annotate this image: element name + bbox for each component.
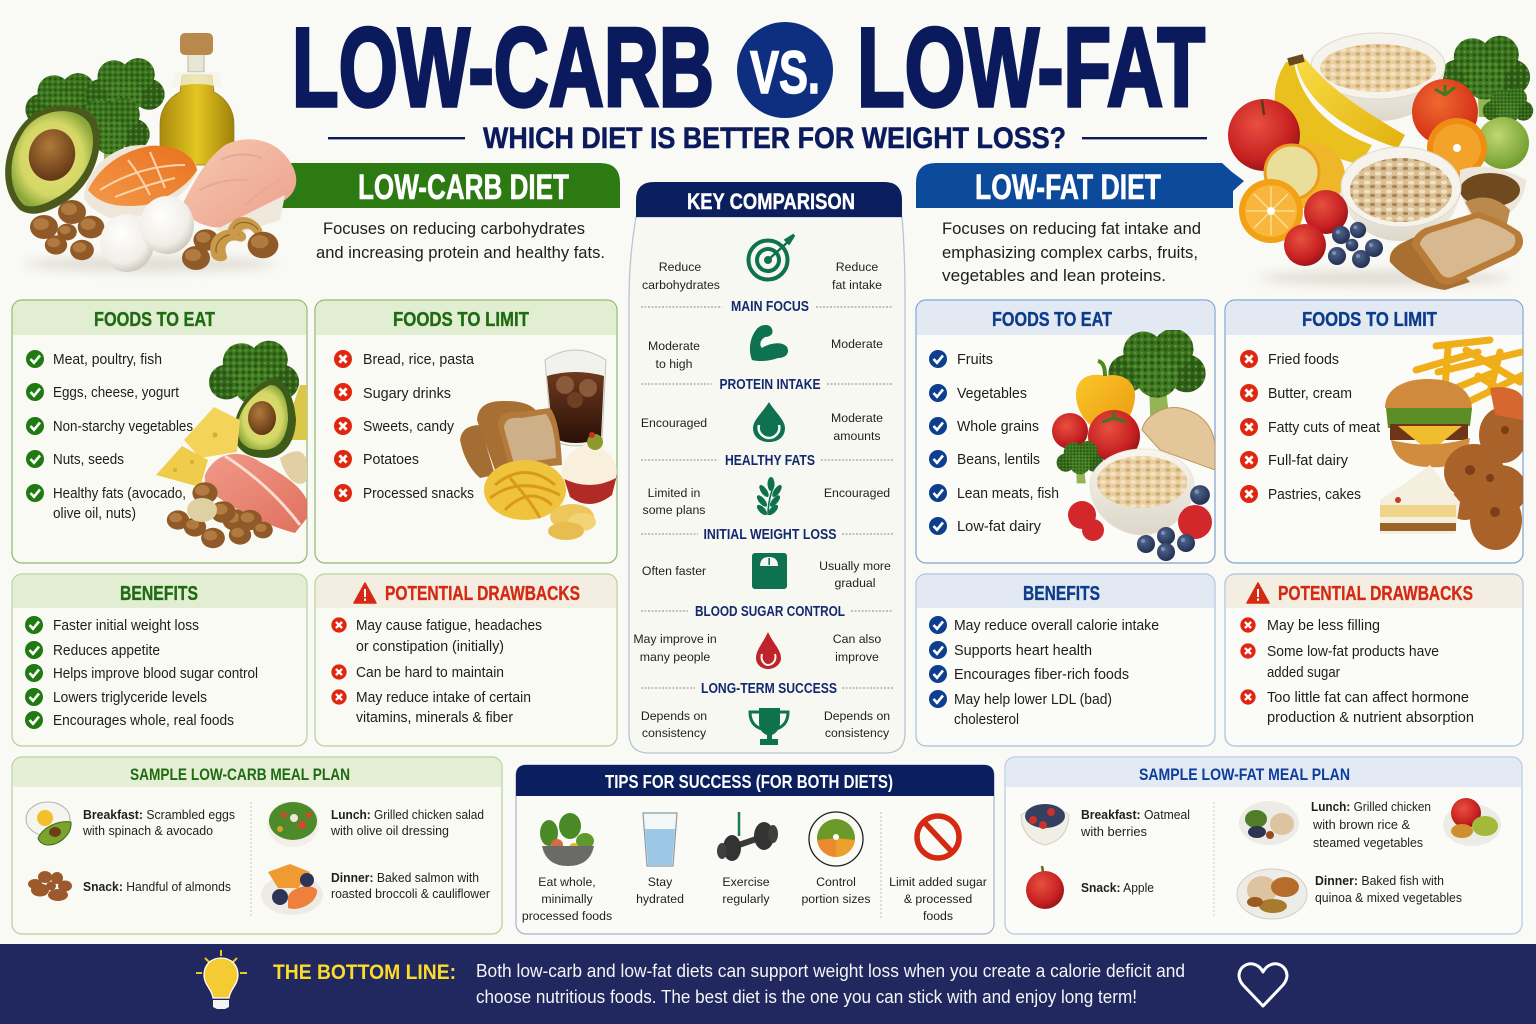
icon: apple bbox=[1026, 866, 1064, 909]
list: foods to eat: Vegetables bbox=[957, 386, 1027, 402]
row: long-term success: May improve in bbox=[633, 632, 717, 646]
panel: low-carb drawbacks: POTENTIAL DRAWBACKS bbox=[385, 583, 580, 605]
text: low-fat description: vegetables and lean proteins. bbox=[942, 267, 1166, 285]
icon: dumbbell bbox=[717, 812, 778, 861]
panel: low-fat drawbacks: Too little fat can affect hormone bbox=[1267, 690, 1469, 706]
panel: low-fat benefits: Supports heart health bbox=[954, 643, 1092, 659]
list: foods to limit: Fried foods bbox=[1268, 352, 1339, 368]
panel: sample low-carb meal plan: Snack: Handful of almonds bbox=[83, 880, 231, 894]
row: main focus: Reduce bbox=[836, 260, 878, 274]
row: main focus bbox=[642, 235, 882, 315]
panel: sample low-carb meal plan: Dinner: Baked salmon with bbox=[331, 871, 479, 885]
text: low-carb description: and increasing protein and healthy fats. bbox=[316, 244, 605, 262]
panel: key comparison bbox=[629, 182, 905, 753]
panel: low-fat benefits: cholesterol bbox=[954, 712, 1019, 728]
panel: sample low-fat meal plan: SAMPLE LOW-FAT MEAL PLAN bbox=[1139, 765, 1350, 784]
list: foods to eat: Fruits bbox=[957, 352, 993, 368]
row: protein intake: Moderate bbox=[831, 337, 883, 351]
list: foods to eat: olive oil, nuts) bbox=[53, 506, 136, 522]
panel: bottom line: THE BOTTOM LINE: bbox=[273, 961, 456, 984]
panel: sample low-carb meal plan: with olive oil dressing bbox=[330, 824, 449, 838]
tip labels: portion sizes bbox=[801, 892, 871, 906]
illustration: low-carb foods bbox=[5, 33, 296, 272]
icon: warning bbox=[354, 583, 376, 603]
list: foods to limit bbox=[363, 352, 475, 502]
list: foods to eat bbox=[957, 352, 1059, 535]
panel: low-carb foods to eat bbox=[12, 300, 308, 563]
row: main focus: Reduce bbox=[659, 260, 701, 274]
illustration: foods to eat bbox=[156, 341, 308, 548]
illustration: foods to limit bbox=[460, 350, 617, 540]
tip labels bbox=[522, 875, 987, 923]
panel: low-fat drawbacks: May be less filling bbox=[1267, 618, 1380, 634]
row: blood sugar control: Usually more bbox=[819, 559, 891, 573]
icon: portion plate bbox=[809, 812, 863, 866]
panel: sample low-carb meal plan: with spinach & avocado bbox=[82, 824, 213, 838]
icon: salad bowl bbox=[540, 813, 594, 866]
list: foods to limit: Bread, rice, pasta bbox=[363, 352, 475, 368]
row: main focus: fat intake bbox=[832, 278, 882, 292]
panel: low-carb benefits: Reduces appetite bbox=[53, 643, 160, 659]
panel: low-fat foods to eat bbox=[916, 300, 1215, 563]
row: consistency: consistency bbox=[825, 726, 890, 740]
list: foods to eat bbox=[53, 352, 193, 522]
row: blood sugar control: gradual bbox=[834, 576, 876, 590]
icon: VS badge bbox=[737, 22, 833, 118]
row: initial weight loss: INITIAL WEIGHT LOSS bbox=[704, 527, 837, 543]
panel: low-fat foods to limit: FOODS TO LIMIT bbox=[1302, 309, 1437, 331]
panel: low-fat drawbacks: Some low-fat products have bbox=[1267, 644, 1439, 660]
tip labels: hydrated bbox=[636, 892, 684, 906]
list: foods to limit: Full-fat dairy bbox=[1268, 453, 1349, 469]
text: low-carb description bbox=[316, 220, 605, 262]
panel: sample low-fat meal plan: with berries bbox=[1080, 825, 1147, 839]
panel: sample low-fat meal plan: Breakfast: Oatmeal bbox=[1081, 808, 1190, 822]
row: main focus: carbohydrates bbox=[642, 278, 720, 292]
panel: low-fat benefits: May reduce overall calorie intake bbox=[954, 618, 1159, 634]
row: healthy fats: Encouraged bbox=[641, 416, 707, 430]
row: main focus: MAIN FOCUS bbox=[731, 299, 809, 315]
row: long-term success: many people bbox=[640, 650, 710, 664]
icon: salad bbox=[267, 801, 319, 847]
list: foods to limit: Sweets, candy bbox=[363, 419, 455, 435]
icon: VS badge: VS. bbox=[750, 39, 820, 106]
list: foods to eat: Nuts, seeds bbox=[53, 452, 124, 468]
panel: low-carb foods to eat: FOODS TO EAT bbox=[94, 309, 215, 331]
panel: low-fat benefits: Encourages fiber-rich foods bbox=[954, 667, 1129, 683]
row: protein intake bbox=[648, 325, 883, 393]
tip labels: Stay bbox=[648, 875, 673, 889]
tip labels: Limit added sugar bbox=[889, 875, 987, 889]
panel: tips for success: TIPS FOR SUCCESS (FOR BOTH DIETS) bbox=[605, 771, 893, 792]
tip labels: foods bbox=[923, 909, 953, 923]
panel: low-fat benefits: May help lower LDL (bad) bbox=[954, 692, 1112, 708]
tip labels: minimally bbox=[541, 892, 593, 906]
row: blood sugar control bbox=[642, 553, 891, 620]
panel: sample low-fat meal plan: steamed vegetables bbox=[1313, 836, 1423, 850]
row: consistency bbox=[641, 708, 890, 745]
panel: low-fat drawbacks: production & nutrient absorption bbox=[1267, 710, 1474, 726]
icon: almonds bbox=[28, 871, 72, 901]
row: blood sugar control: Often faster bbox=[642, 564, 706, 578]
list: foods to eat: Low-fat dairy bbox=[957, 519, 1042, 535]
banner: low-carb diet bbox=[280, 163, 620, 208]
panel: tips for success bbox=[516, 765, 994, 934]
list: foods to limit: Sugary drinks bbox=[363, 386, 451, 402]
illustration: foods to limit bbox=[1380, 340, 1527, 550]
panel: sample low-carb meal plan: Breakfast: Scrambled eggs bbox=[83, 808, 235, 822]
list: foods to eat: Healthy fats (avocado, bbox=[53, 486, 186, 502]
row: initial weight loss: Limited in bbox=[648, 486, 700, 500]
icon: warning bbox=[1247, 583, 1269, 603]
row: long-term success bbox=[633, 632, 881, 697]
panel: bottom line: Both low-carb and low-fat diets can support weight loss when you create a calorie deficit and bbox=[476, 961, 1185, 981]
tip labels: processed foods bbox=[522, 909, 612, 923]
panel: sample low-fat meal plan: quinoa & mixed vegetables bbox=[1315, 891, 1462, 905]
tip labels: Exercise bbox=[722, 875, 770, 889]
banner: low-fat diet: LOW-FAT DIET bbox=[975, 168, 1161, 207]
row: consistency: Depends on bbox=[824, 709, 890, 723]
list: foods to limit: Potatoes bbox=[363, 452, 419, 468]
row: protein intake: PROTEIN INTAKE bbox=[720, 377, 821, 393]
list: foods to limit: Fatty cuts of meat bbox=[1268, 420, 1380, 436]
panel: low-carb benefits bbox=[12, 574, 307, 746]
row: long-term success: improve bbox=[835, 650, 879, 664]
list: foods to limit: Butter, cream bbox=[1268, 386, 1352, 402]
panel: low-fat foods to limit bbox=[1225, 300, 1527, 563]
panel: low-fat drawbacks: POTENTIAL DRAWBACKS bbox=[1278, 583, 1473, 605]
heading: key comparison: KEY COMPARISON bbox=[687, 189, 855, 214]
tip labels: regularly bbox=[722, 892, 770, 906]
panel: low-fat benefits bbox=[916, 574, 1215, 746]
icon: eggs and avocado bbox=[26, 802, 71, 845]
row: long-term success: LONG-TERM SUCCESS bbox=[701, 681, 837, 697]
list: foods to eat: Lean meats, fish bbox=[957, 486, 1059, 502]
row: healthy fats bbox=[641, 402, 883, 469]
row: initial weight loss: some plans bbox=[643, 503, 705, 517]
panel: low-carb benefits: Faster initial weight loss bbox=[53, 618, 199, 634]
panel: low-carb foods to limit: FOODS TO LIMIT bbox=[393, 309, 529, 331]
icon: oatmeal bowl bbox=[1021, 804, 1069, 845]
row: protein intake: Moderate bbox=[648, 339, 700, 353]
panel: low-carb drawbacks: May cause fatigue, headaches bbox=[356, 618, 542, 634]
icon: no sign bbox=[917, 816, 959, 858]
icon: heart bbox=[1239, 964, 1287, 1006]
panel: low-carb drawbacks: vitamins, minerals & fiber bbox=[356, 710, 513, 726]
title: LOW-CARB bbox=[292, 5, 714, 130]
panel: low-carb drawbacks: May reduce intake of certain bbox=[356, 690, 531, 706]
banner: low-carb diet: LOW-CARB DIET bbox=[358, 168, 569, 207]
list: foods to limit: Pastries, cakes bbox=[1268, 487, 1361, 503]
panel: low-fat drawbacks: added sugar bbox=[1267, 665, 1340, 681]
row: healthy fats: Moderate bbox=[831, 411, 883, 425]
row: protein intake: to high bbox=[656, 357, 693, 371]
list: foods to eat: Meat, poultry, fish bbox=[53, 352, 162, 368]
icon: light bulb bbox=[196, 950, 247, 1009]
list: foods to eat: Eggs, cheese, yogurt bbox=[53, 385, 179, 401]
panel: sample low-fat meal plan: Dinner: Baked fish with bbox=[1315, 874, 1444, 888]
panel: sample low-carb meal plan: Lunch: Grilled chicken salad bbox=[331, 808, 484, 822]
row: healthy fats: HEALTHY FATS bbox=[725, 453, 815, 469]
row: blood sugar control: BLOOD SUGAR CONTROL bbox=[695, 604, 845, 620]
banner: low-fat diet bbox=[916, 163, 1244, 208]
panel: sample low-fat meal plan: Snack: Apple bbox=[1081, 881, 1154, 895]
row: initial weight loss bbox=[643, 477, 890, 543]
tip labels: Eat whole, bbox=[538, 875, 596, 889]
icon: salmon dinner bbox=[261, 864, 323, 915]
row: consistency: consistency bbox=[642, 726, 707, 740]
illustration: low-fat foods bbox=[1228, 33, 1533, 290]
panel: low-fat foods to eat: FOODS TO EAT bbox=[992, 309, 1112, 331]
panel: sample low-carb meal plan: SAMPLE LOW-CARB MEAL PLAN bbox=[130, 765, 350, 784]
text: low-fat description: Focuses on reducing fat intake and bbox=[942, 220, 1201, 238]
title: LOW-FAT bbox=[857, 5, 1205, 130]
list: foods to eat: Beans, lentils bbox=[957, 452, 1040, 468]
row: healthy fats: amounts bbox=[833, 429, 881, 443]
panel: sample low-carb meal plan bbox=[12, 757, 502, 934]
tip labels: & processed bbox=[904, 892, 972, 906]
panel: low-carb drawbacks: or constipation (initially) bbox=[356, 639, 504, 655]
panel: sample low-fat meal plan: Lunch: Grilled chicken bbox=[1311, 800, 1431, 814]
list: foods to eat: Whole grains bbox=[957, 419, 1039, 435]
panel: low-carb drawbacks bbox=[315, 574, 617, 746]
panel: sample low-carb meal plan: roasted broccoli & cauliflower bbox=[331, 887, 490, 901]
panel: low-carb benefits: Lowers triglyceride levels bbox=[53, 690, 207, 706]
list: foods to eat: Non-starchy vegetables bbox=[53, 419, 193, 435]
row: long-term success: Can also bbox=[833, 632, 881, 646]
subtitle: WHICH DIET IS BETTER FOR WEIGHT LOSS? bbox=[483, 122, 1066, 155]
panel: low-carb benefits: BENEFITS bbox=[120, 583, 198, 605]
panel: bottom line bbox=[0, 944, 1536, 1024]
title bbox=[292, 5, 1205, 130]
row: initial weight loss: Encouraged bbox=[824, 486, 890, 500]
panel: low-carb foods to limit bbox=[315, 300, 617, 563]
tip labels: Control bbox=[816, 875, 856, 889]
panel: sample low-fat meal plan bbox=[1005, 757, 1522, 934]
text: low-fat description bbox=[942, 220, 1201, 285]
icon: dinner plate bbox=[1237, 869, 1307, 919]
panel: low-carb benefits: Encourages whole, real foods bbox=[53, 713, 234, 729]
text: low-fat description: emphasizing complex carbs, fruits, bbox=[942, 244, 1198, 262]
icon: water glass bbox=[643, 813, 677, 866]
panel: bottom line: choose nutritious foods. The best diet is the one you can stick with and enjoy long term! bbox=[476, 987, 1137, 1007]
icon: lunch plate bbox=[1239, 801, 1299, 845]
panel: low-carb drawbacks: Can be hard to maintain bbox=[356, 665, 504, 681]
icon: vegetable plate bbox=[1443, 798, 1501, 846]
panel: sample low-fat meal plan: with brown rice & bbox=[1312, 818, 1411, 832]
list: foods to limit bbox=[1268, 352, 1380, 503]
panel: low-fat drawbacks bbox=[1225, 574, 1523, 746]
text: low-carb description: Focuses on reducing carbohydrates bbox=[323, 220, 585, 238]
illustration: foods to eat bbox=[1052, 329, 1215, 561]
panel: low-fat benefits: BENEFITS bbox=[1023, 583, 1100, 605]
list: foods to limit: Processed snacks bbox=[363, 486, 474, 502]
panel: low-carb benefits: Helps improve blood sugar control bbox=[53, 666, 258, 682]
row: consistency: Depends on bbox=[641, 709, 707, 723]
